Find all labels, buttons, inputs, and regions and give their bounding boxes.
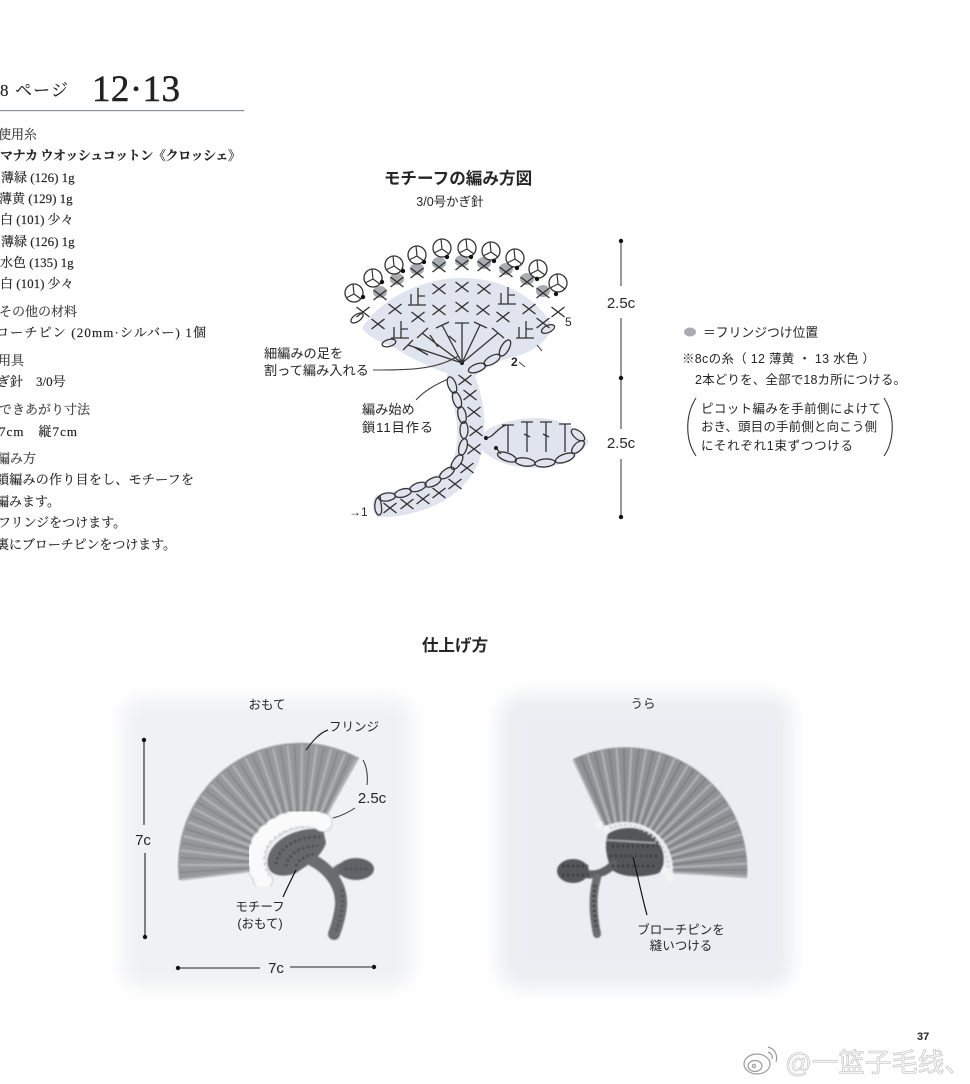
heading: finishing: 仕上げ方 xyxy=(422,635,488,655)
callout: motif front: モチーフ xyxy=(235,900,285,914)
page number: 37 xyxy=(917,1031,929,1043)
text block: materials and instructions column: 水色 (135) 1g xyxy=(0,255,74,270)
text: bracketed picot note: にそれぞれ1束ずつつける xyxy=(701,439,853,453)
text block: materials and instructions column: ローチピン (20mm·シルバー) 1個 xyxy=(0,325,206,340)
text block: materials and instructions column: 薄緑 (126) 1g xyxy=(1,170,75,185)
fringe attachment marks xyxy=(373,255,550,298)
text block: materials and instructions column: マナカ ウオッシュコットン《クロッシェ》 xyxy=(0,148,241,163)
text block: materials and instructions column: 白 (101) 少々 xyxy=(0,212,74,227)
dimension: chart height 2.5c + 2.5c: 2.5c xyxy=(607,295,636,312)
text block: materials and instructions column: 鎖編みの作り目をし、モチーフを xyxy=(0,472,194,487)
treble stitches fanning from centre xyxy=(403,322,504,363)
stitch row labels: 5 xyxy=(565,315,572,329)
dimension: width 7c xyxy=(176,960,376,977)
callout: split the foot of single crochet: 細編みの足を xyxy=(264,346,343,361)
dimension: chart height 2.5c + 2.5c: 2.5c xyxy=(607,435,636,452)
text: yarn note xyxy=(682,351,906,387)
callout: split the foot of single crochet: 割って編み入れる xyxy=(264,363,369,378)
text block: materials and instructions column: その他の材料 xyxy=(0,304,77,319)
heading: motif chart title: モチーフの編み方図 xyxy=(384,168,532,188)
legend: fringe position: ＝フリンジつけ位置 xyxy=(703,325,818,340)
callout: starting chain of 11 xyxy=(362,379,448,435)
page heading: page reference and pattern number: 8 ページ xyxy=(0,81,68,100)
callout: starting chain of 11: 鎖11目作る xyxy=(362,420,433,435)
text block: materials and instructions column: フリンジをつけます。 xyxy=(0,515,126,530)
text block: materials and instructions column: 薄黄 (129) 1g xyxy=(0,191,73,206)
text: bracketed picot note xyxy=(688,398,892,456)
panel: back photo xyxy=(499,694,793,988)
dimension: fringe length 2.5c xyxy=(333,760,387,818)
text block: materials and instructions column: 白 (101) 少々 xyxy=(0,276,74,291)
text block: materials and instructions column: 7cm 縦7cm xyxy=(0,424,77,439)
text: yarn note: 2本どりを、全部で18カ所につける。 xyxy=(695,373,906,387)
chart: crochet motif diagram xyxy=(345,239,589,519)
motif: front xyxy=(268,829,374,934)
motif silhouette: fan, stem and leaf xyxy=(362,278,589,517)
callout: sew on the brooch pin: ブローチピンを xyxy=(637,922,725,937)
page heading: page reference and pattern number xyxy=(0,69,244,111)
chain stitches xyxy=(349,311,587,515)
text block: materials and instructions column: 薄緑 (126) 1g xyxy=(1,234,75,249)
callout: sew on the brooch pin: 縫いつける xyxy=(650,938,712,953)
icon: weibo xyxy=(744,1047,777,1074)
dimension: height 7c: 7c xyxy=(135,832,151,849)
text block: materials and instructions column: 裏にブローチピンをつけます。 xyxy=(0,537,176,552)
photo background xyxy=(122,698,412,988)
page heading: page reference and pattern number: 12·13 xyxy=(92,69,180,110)
dimension: fringe length 2.5c: 2.5c xyxy=(358,790,387,807)
motif: back xyxy=(557,821,674,934)
text block: materials and instructions column xyxy=(0,127,241,552)
label: front side: おもて xyxy=(248,698,286,712)
stitch row labels: 2 xyxy=(511,355,518,369)
panel: front photo xyxy=(122,698,412,988)
dimension: width 7c: 7c xyxy=(268,960,284,977)
single crochet stitches xyxy=(356,260,564,513)
text: bracketed picot note: おき、頭目の手前側と向こう側 xyxy=(701,419,877,434)
callout: motif front xyxy=(235,870,296,931)
callout: sew on the brooch pin xyxy=(633,857,725,953)
stitch row labels: →1 xyxy=(349,505,368,519)
text: yarn note: ※8cの糸（ 12 薄黄 ・ 13 水色 ） xyxy=(682,351,875,366)
callout: fringe: フリンジ xyxy=(329,720,379,734)
watermark: weibo handle: @一篮子毛线、 xyxy=(785,1048,970,1078)
picot edging: front xyxy=(256,818,326,880)
callout: split the foot of single crochet xyxy=(264,346,458,378)
dimension: height 7c xyxy=(135,738,151,939)
dimension: chart height 2.5c + 2.5c xyxy=(607,239,636,519)
text: bracketed picot note: ピコット編みを手前側によけて xyxy=(701,401,881,416)
picot stitches xyxy=(345,239,567,302)
text block: materials and instructions column: できあがり寸法 xyxy=(0,402,91,417)
callout: motif front: (おもて) xyxy=(237,917,283,931)
photo background xyxy=(499,694,793,988)
text: hook size: 3/0号かぎ針 xyxy=(416,194,484,209)
slip stitch dots xyxy=(361,255,558,450)
fringe: back xyxy=(573,747,747,878)
fringe: front xyxy=(178,743,359,880)
label: back side: うら xyxy=(630,697,656,711)
callout: fringe xyxy=(306,720,379,750)
double stitch marks xyxy=(391,287,534,338)
callout: starting chain of 11: 編み始め xyxy=(362,402,415,417)
stitch row labels xyxy=(349,315,572,519)
